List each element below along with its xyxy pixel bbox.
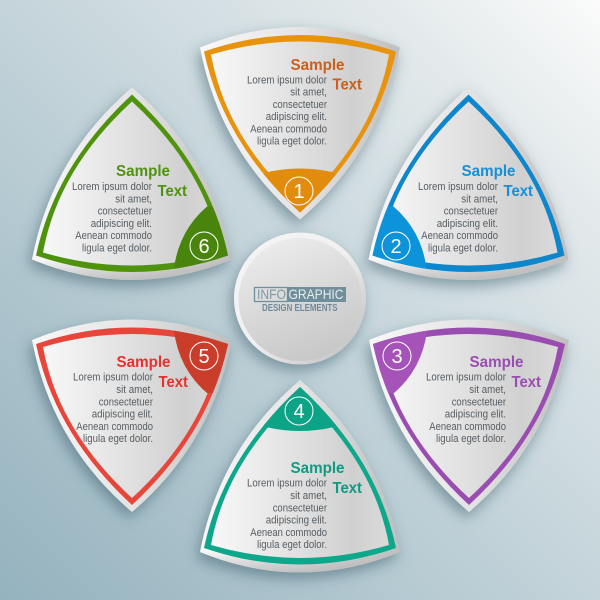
panel 2 body text: sit amet, bbox=[461, 193, 498, 205]
panel 2 body text: adipiscing elit. bbox=[437, 218, 498, 230]
panel 5 body text bbox=[73, 372, 153, 445]
panel 6 shape bbox=[32, 88, 252, 288]
panel 3 body text: adipiscing elit. bbox=[445, 408, 506, 420]
panel 6 badge bbox=[190, 232, 218, 260]
panel 6: green bbox=[32, 88, 252, 288]
panel 3 heading: Text bbox=[512, 374, 541, 391]
panel 4: teal bbox=[200, 380, 400, 572]
logo: INFO outlined box: INFO bbox=[257, 286, 286, 302]
panel 4 body text: adipiscing elit. bbox=[266, 514, 327, 526]
panel 2 shape bbox=[348, 88, 568, 288]
panel 2 heading bbox=[462, 163, 533, 200]
panel 6 body text: Aenean commodo bbox=[75, 230, 152, 242]
panel 1 body text bbox=[247, 74, 327, 148]
panel 5 badge: 5 bbox=[198, 346, 210, 368]
panel 5 body text: adipiscing elit. bbox=[92, 408, 153, 420]
panel 3 heading: Sample bbox=[470, 354, 524, 371]
panel 3: purple bbox=[349, 312, 569, 512]
panel 4 badge: 4 bbox=[293, 401, 305, 423]
panel 5 heading: Text bbox=[158, 374, 188, 391]
panel 6 heading: Sample bbox=[116, 163, 170, 180]
panel 1 heading: Sample bbox=[290, 57, 345, 74]
panel 1 badge: 1 bbox=[293, 181, 305, 203]
panel 3 shape bbox=[349, 312, 569, 512]
panel 6 heading bbox=[116, 163, 187, 200]
panel 5 badge bbox=[190, 342, 218, 370]
panel 3 heading bbox=[470, 354, 541, 391]
panel 4 badge bbox=[285, 397, 313, 425]
panel 1 heading bbox=[290, 57, 362, 94]
panel 2: blue bbox=[348, 88, 568, 288]
panel 1 body text: Lorem ipsum dolor bbox=[247, 74, 327, 86]
panel 5 shape bbox=[32, 312, 252, 512]
panel 2 badge: 2 bbox=[390, 236, 402, 258]
panel 5 heading: Sample bbox=[116, 354, 171, 371]
panel 3 badge: 3 bbox=[391, 346, 403, 368]
panel 3 body text: Aenean commodo bbox=[429, 421, 506, 433]
panel 5 body text: Lorem ipsum dolor bbox=[73, 372, 153, 384]
subtitle: DESIGN ELEMENTS bbox=[262, 303, 338, 314]
panel 1 body text: consectetuer bbox=[273, 99, 327, 111]
panel 5 body text: consectetuer bbox=[99, 396, 153, 408]
panel 6 body text bbox=[72, 181, 152, 254]
center disc face bbox=[238, 238, 362, 361]
panel 1 heading: Text bbox=[332, 76, 362, 94]
panel 1 body text: sit amet, bbox=[290, 87, 327, 99]
panel 3 badge bbox=[383, 342, 411, 370]
panel 1 badge bbox=[285, 177, 313, 205]
panel 4 body text: sit amet, bbox=[290, 490, 327, 502]
panel 5 body text: sit amet, bbox=[116, 384, 153, 396]
panel 1: orange bbox=[200, 27, 400, 220]
panel 2 heading: Sample bbox=[462, 163, 516, 180]
panel 2 body text: ligula eget dolor. bbox=[428, 242, 498, 254]
panel 4 body text bbox=[247, 478, 327, 551]
panel 4 body text: ligula eget dolor. bbox=[257, 539, 327, 551]
panel 2 badge bbox=[382, 232, 410, 260]
panel 4 body text: Aenean commodo bbox=[250, 527, 327, 539]
center disc bbox=[234, 232, 366, 364]
panel 3 body text: consectetuer bbox=[452, 396, 506, 408]
panel 6 badge: 6 bbox=[198, 236, 210, 258]
panel 1 body text: ligula eget dolor. bbox=[257, 136, 327, 148]
center disc rim bbox=[234, 232, 366, 364]
panel 2 body text: Aenean commodo bbox=[421, 230, 498, 242]
panel 6 body text: adipiscing elit. bbox=[91, 218, 152, 230]
panel 6 body text: sit amet, bbox=[115, 193, 152, 205]
panel 6 body text: consectetuer bbox=[98, 206, 152, 218]
panel 3 body text: ligula eget dolor. bbox=[436, 433, 506, 445]
panel 4 heading: Sample bbox=[290, 460, 345, 477]
panel 6 body text: Lorem ipsum dolor bbox=[72, 181, 152, 193]
panel 1 body text: Aenean commodo bbox=[250, 123, 327, 135]
panel 6 heading: Text bbox=[158, 183, 187, 200]
panel 6 body text: ligula eget dolor. bbox=[82, 242, 152, 254]
panel 2 body text: consectetuer bbox=[444, 206, 498, 218]
panel 2 body text bbox=[418, 181, 498, 254]
panel 4 heading: Text bbox=[332, 480, 362, 497]
panel 4 body text: Lorem ipsum dolor bbox=[247, 478, 327, 490]
panel 1 shape bbox=[200, 27, 400, 220]
panel 5: red bbox=[32, 312, 252, 512]
panel 3 body text: sit amet, bbox=[469, 384, 506, 396]
panel 5 heading bbox=[116, 354, 188, 391]
panel 3 body text bbox=[426, 372, 506, 445]
panel 2 heading: Text bbox=[504, 183, 533, 200]
panel 2 body text: Lorem ipsum dolor bbox=[418, 181, 498, 193]
panel 4 heading bbox=[290, 460, 362, 497]
panel 5 body text: ligula eget dolor. bbox=[83, 433, 153, 445]
panel 1 body text: adipiscing elit. bbox=[266, 111, 327, 123]
logo: GRAPHIC filled box: GRAPHIC bbox=[288, 286, 344, 302]
panel 4 shape bbox=[200, 380, 400, 572]
panel 4 body text: consectetuer bbox=[273, 502, 327, 514]
panel 5 body text: Aenean commodo bbox=[76, 421, 153, 433]
panel 3 body text: Lorem ipsum dolor bbox=[426, 372, 506, 384]
